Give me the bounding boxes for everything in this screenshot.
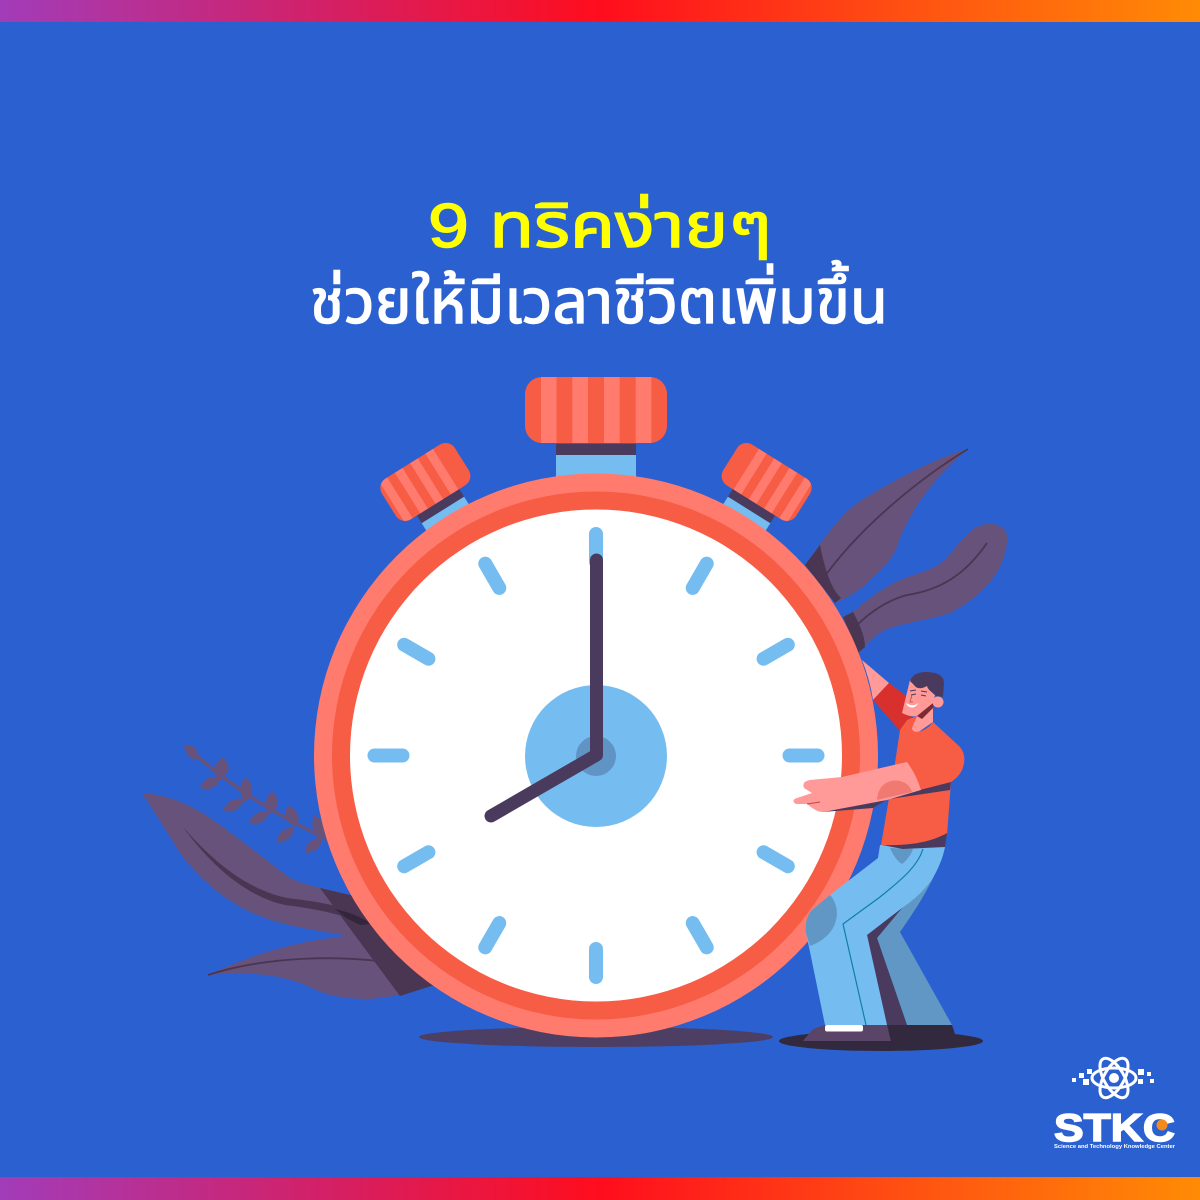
man ground shadow — [779, 1031, 983, 1051]
leaf overlays — [805, 545, 841, 603]
leaves upper right — [805, 449, 1007, 653]
right crown — [722, 443, 812, 530]
arm shadow on shirt — [890, 782, 951, 799]
centre disc — [525, 685, 667, 827]
dark overlay where leaves meet clock — [320, 888, 450, 996]
title: 9 ทริคง่ายๆ — [428, 192, 772, 261]
title: ช่วยให้มีเวลาชีวิตเพิ่มขึ้น — [310, 260, 888, 337]
neck — [911, 697, 933, 734]
bottom gradient bar — [0, 1177, 1200, 1200]
left crown — [380, 443, 470, 530]
stopwatch body — [314, 474, 878, 1038]
ear — [932, 696, 944, 708]
face — [902, 680, 935, 716]
leaves lower left — [142, 745, 450, 999]
front leg — [806, 845, 945, 1025]
neck shadow — [917, 703, 933, 719]
man pushing the clock — [793, 660, 964, 1041]
pocket — [890, 848, 913, 864]
upper arm skin — [862, 660, 889, 700]
eyes — [910, 690, 927, 696]
shirt — [881, 716, 964, 845]
logo wordmark: STKC — [1054, 1107, 1175, 1150]
nose — [910, 695, 913, 702]
hair — [910, 672, 944, 697]
forearm — [793, 762, 921, 812]
back leg — [877, 878, 952, 1025]
upper leaf — [805, 449, 968, 603]
hour ticks — [374, 534, 818, 977]
logo pixels — [1072, 1069, 1154, 1085]
finger line — [807, 802, 820, 804]
clock ground shadow — [419, 1027, 773, 1047]
leg shadow — [867, 908, 907, 1025]
trouser seam — [843, 849, 923, 1025]
top crown — [525, 377, 667, 485]
logo tagline: Science and Technology Knowledge Center — [1054, 1144, 1176, 1150]
lower curled leaf — [843, 524, 1007, 653]
large leaf — [142, 793, 440, 945]
elbow — [877, 781, 912, 800]
shoes — [803, 1025, 891, 1041]
veins — [183, 827, 372, 926]
sprig — [184, 745, 340, 853]
lower leaf — [208, 930, 450, 999]
logo atom icon — [1092, 1054, 1136, 1102]
logo orange dot — [1156, 1120, 1168, 1130]
knee — [806, 895, 837, 946]
waistband — [882, 833, 947, 849]
top gradient bar — [0, 0, 1200, 22]
leaf veins — [820, 449, 968, 583]
clock hands — [491, 560, 596, 816]
logo — [1054, 1054, 1176, 1150]
sleeve — [873, 683, 912, 731]
smile — [906, 703, 918, 708]
title — [310, 192, 888, 337]
